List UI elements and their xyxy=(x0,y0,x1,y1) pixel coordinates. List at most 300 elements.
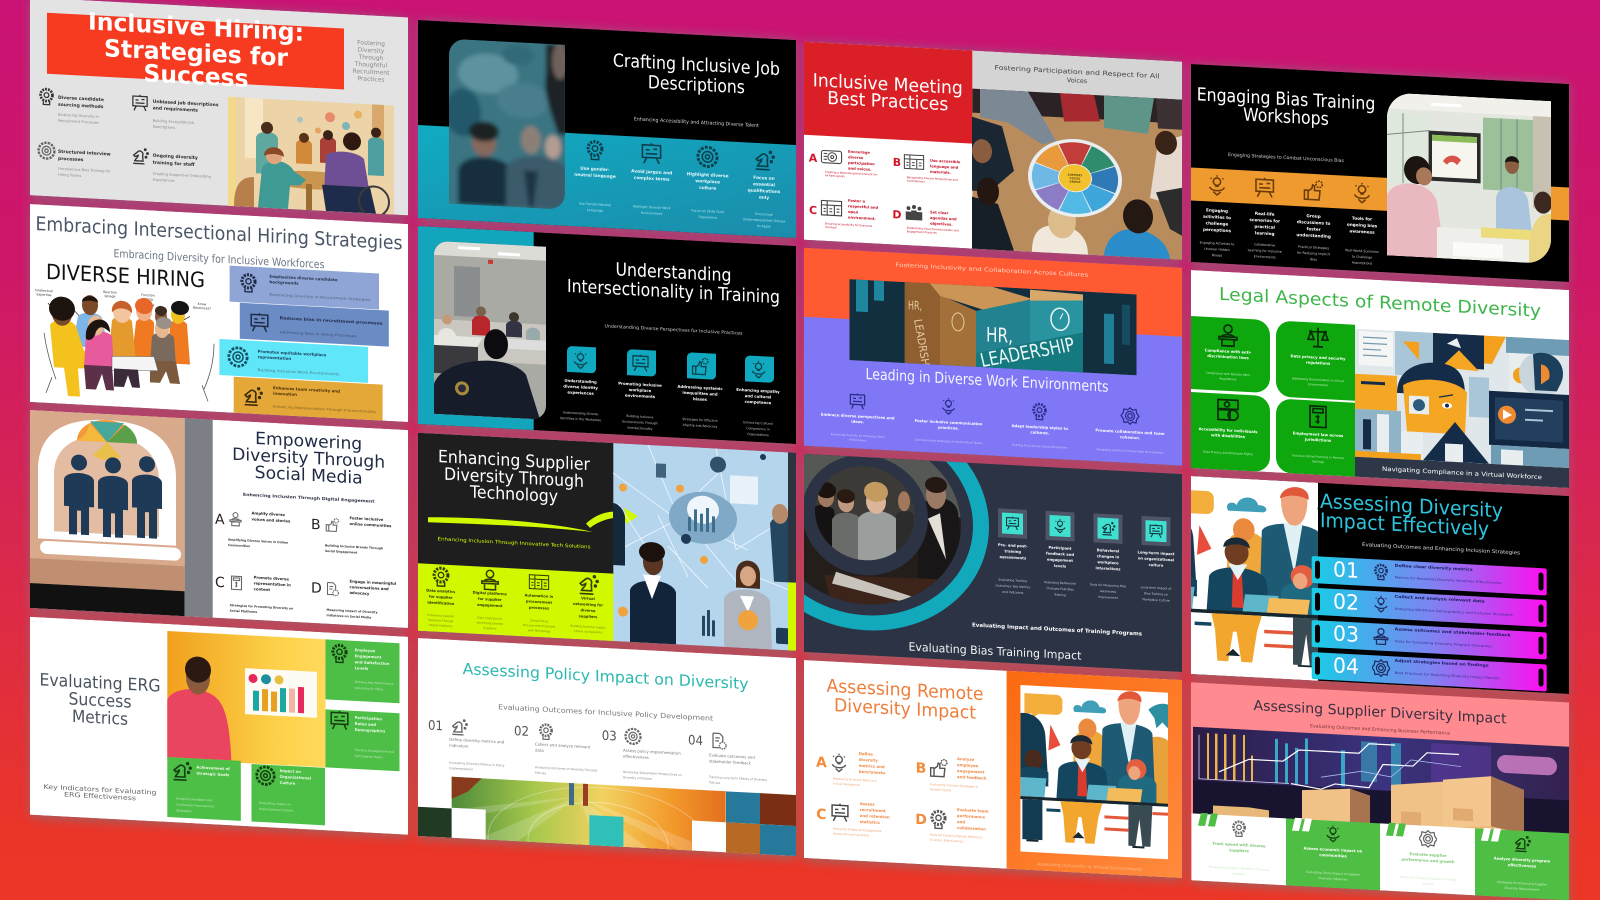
item: training xyxy=(133,148,211,185)
step: representation: Building Inclusive Work Environments xyxy=(258,368,340,376)
card: supplier performance: Success xyxy=(1422,882,1434,886)
photo: circle of people around wheel: SUPPORT xyxy=(1068,173,1082,177)
item D: and xyxy=(957,819,965,824)
item: behavior: Tools for Measuring Bias xyxy=(1089,582,1127,588)
item: empathy: Competence in xyxy=(746,426,770,431)
slide: Legal Aspects of Remote Diversity xyxy=(1191,270,1569,488)
step 01: Implementation xyxy=(449,766,473,771)
item: assessments: Evaluating Training xyxy=(998,578,1027,583)
card: anti-discrimination: Compliance with Remote Work xyxy=(1206,371,1250,377)
item C: statistics xyxy=(860,819,880,825)
item C: Strategies for Promoting Diversity on xyxy=(230,603,293,611)
item: perspectives: ideas. xyxy=(851,419,865,424)
item A: metrics and xyxy=(859,763,885,769)
item: long-term: Long-term Impact of xyxy=(1141,585,1172,591)
item: discussions: discussions to xyxy=(1297,219,1330,226)
bar 04: 04 xyxy=(1333,653,1359,679)
item: collaboration: Navigating Conflict in Diverse Work Environments xyxy=(1096,447,1164,455)
item B: Analyze xyxy=(957,756,975,762)
step 03: Reviewing Stakeholder Perspectives on xyxy=(623,770,682,777)
item D: D xyxy=(915,812,927,828)
item: platforms: Digital platforms xyxy=(473,591,507,596)
item D: Tools for Tracking Remote Workforce xyxy=(929,833,983,839)
step: candidate backgrounds xyxy=(230,266,379,309)
item: training: Creating Supportive Onboarding xyxy=(153,172,211,179)
illustration: diverse hiring sketch: Intellectual xyxy=(35,288,53,293)
subtitle: Evaluating Impact and Outcomes of Training Programs xyxy=(972,623,1142,638)
item B: Building Inclusive Brands Through xyxy=(325,543,383,550)
card: economic impact: Assess economic impact on xyxy=(1304,845,1363,854)
item: networking: Virtual xyxy=(581,596,595,601)
photo: HR leadership cubes: LEADERSHIP xyxy=(978,334,1077,372)
item: behavior xyxy=(1089,513,1127,600)
slide: Engaging Bias Training Workshops xyxy=(1191,64,1569,282)
photo: circle of people around wheel xyxy=(972,89,1182,260)
side subtitle: Through xyxy=(358,54,384,62)
illustration: compliance collage xyxy=(1355,329,1569,468)
step 02: Policies xyxy=(535,771,547,775)
item: culture: culture xyxy=(699,185,716,192)
bar 03: Tools for Evaluating Diversity Program Outcomes xyxy=(1393,639,1492,648)
item: activities xyxy=(1200,174,1234,258)
item C: and retention xyxy=(860,813,890,820)
item C: Assess xyxy=(860,801,875,807)
item: environments: environments xyxy=(625,393,656,399)
item D: Measuring Impact of Diversity xyxy=(326,608,378,614)
orange band xyxy=(1191,168,1569,221)
photo: training room xyxy=(433,239,547,421)
item: behavior: changes in xyxy=(1097,554,1120,559)
item: identity: Identities in the Workplace xyxy=(560,416,601,422)
card: accessibility: Data Privacy and Employee Rights xyxy=(1203,450,1253,456)
item: networking: Chains via Networks xyxy=(574,629,603,634)
illustration: diverse hiring sketch: Reaction xyxy=(103,290,117,295)
item: long-term: Workplace Culture xyxy=(1142,597,1170,603)
item: gender-neutral xyxy=(574,141,616,213)
card: strategic goals: Strategic Goals xyxy=(196,771,230,777)
step: representation: representation xyxy=(258,354,291,361)
title: Success xyxy=(144,59,248,93)
item: engagement: engagement xyxy=(1047,558,1073,563)
step: candidate backgrounds: Emphasizes diverse candidate xyxy=(269,274,338,282)
item B xyxy=(916,754,987,794)
item: discussions: Practical Strategies xyxy=(1298,245,1329,250)
item B: employee xyxy=(957,762,979,768)
card: strategic goals: Strategies xyxy=(176,808,192,813)
step: reduces bias: Addressing Bias in Hiring Processes xyxy=(280,330,357,338)
item C xyxy=(215,573,293,616)
card: participation xyxy=(326,709,400,771)
card: anti-discrimination: discrimination laws xyxy=(1207,353,1250,360)
item: activities: Uncover Hidden xyxy=(1204,247,1230,252)
item: qualifications: to Apply xyxy=(757,224,771,229)
card: program effectiveness: Strategies for Enhancing Supplier xyxy=(1497,880,1548,887)
photo: HR leadership cubes xyxy=(850,279,1136,387)
item: job descriptions: Unbiased job descriptions xyxy=(153,99,219,108)
card: accessibility: with disabilities xyxy=(1211,432,1246,439)
item A xyxy=(215,508,291,550)
step 03: effectiveness xyxy=(623,754,649,760)
card: employment law: jurisdictions xyxy=(1304,436,1332,443)
item C: Ensuring Accessibility for Everyone xyxy=(825,221,873,228)
item: inequalities: biases xyxy=(693,396,708,402)
card: strategic goals: Achievement of xyxy=(196,765,230,771)
card: anti-discrimination: Regulations xyxy=(1220,377,1237,381)
item: qualifications: Underrepresented Groups xyxy=(743,217,786,223)
item: networking: suppliers xyxy=(579,614,597,619)
item C: recruitment xyxy=(860,807,886,813)
item: culture xyxy=(687,146,729,220)
title: Strategies for xyxy=(104,34,288,72)
step: creativity xyxy=(234,377,383,421)
bar 03: Assess outcomes and stakeholder feedback xyxy=(1395,626,1511,637)
step: reduces bias xyxy=(240,303,389,347)
card: engagement: Levels xyxy=(355,665,369,671)
item A: Define xyxy=(859,751,873,757)
item: training: Experiences xyxy=(153,178,175,183)
item B: B xyxy=(893,156,901,169)
item: inequalities: inequalities and xyxy=(682,390,718,397)
item C: Social Platforms xyxy=(230,609,257,614)
item: engagement: feedback and xyxy=(1046,552,1074,557)
item: inequalities: Strategies for Effective xyxy=(682,417,718,423)
item: discussions: for Reducing Implicit xyxy=(1297,251,1331,256)
card: engagement: Defining Key Performance xyxy=(355,680,394,686)
item: inequalities: Allyship and Advocacy xyxy=(683,423,718,429)
lime swoosh and arrow xyxy=(428,497,638,534)
item D: Diversity Effectiveness xyxy=(930,838,963,843)
item: scenarios: practical xyxy=(1254,224,1276,230)
card: supplier performance xyxy=(1380,822,1475,895)
item: empathy: Enhancing Cultural xyxy=(743,420,773,426)
photo: HR leadership cubes: HR, xyxy=(908,298,922,313)
item D: advocacy xyxy=(350,590,370,596)
item: collaboration: Promote collaboration and team xyxy=(1095,427,1165,436)
item: training: Ongoing diversity xyxy=(153,153,198,161)
slide: Assessing Policy Impact on Diversity xyxy=(418,638,796,900)
item: sourcing: Diverse candidate xyxy=(58,95,104,103)
step 02: 02 xyxy=(514,724,529,740)
title xyxy=(1320,489,1503,542)
item A xyxy=(808,150,878,178)
item: tools: to Challenge xyxy=(1352,255,1372,260)
card: economic impact: communities xyxy=(1319,852,1347,859)
item B: B xyxy=(916,760,926,777)
card: participation: Tracking Engagement and xyxy=(354,748,394,754)
item: empathy: Organizations xyxy=(747,432,769,437)
card: engagement xyxy=(326,639,400,703)
card: engagement: and Satisfaction xyxy=(355,659,390,666)
step 01: 01 xyxy=(428,719,443,734)
item: tools: ongoing bias xyxy=(1347,222,1378,228)
illustration: diverse hiring sketch: Hiring xyxy=(143,297,153,302)
item D: Initiatives on Social Media xyxy=(326,613,371,620)
step: representation: Promotes equitable workplace xyxy=(258,349,327,357)
dark left panel xyxy=(418,433,613,574)
card: strategic goals xyxy=(167,757,241,821)
item: assessments: assessments xyxy=(999,555,1027,561)
item A: All Participants xyxy=(825,173,846,178)
title: Diversity Through xyxy=(232,445,385,473)
step: candidate backgrounds: backgrounds xyxy=(269,279,299,286)
slide: Crafting Inclusive Job Descriptions xyxy=(418,20,796,238)
item: environments xyxy=(618,349,662,431)
slide: Assessing Supplier Diversity Impact xyxy=(1191,682,1569,900)
item A: Creating a Welcoming Environment for xyxy=(825,170,878,177)
item: job descriptions: Descriptions xyxy=(153,125,175,130)
card: organizational culture: Culture xyxy=(280,780,296,786)
diagram wheel xyxy=(1028,137,1122,220)
card: engagement: Indicators for ERGs xyxy=(355,686,384,691)
item: assessments: training xyxy=(1005,549,1021,554)
step 01: Evaluating Diversity Metrics in Policy xyxy=(449,761,505,768)
title: Technology xyxy=(469,482,558,507)
item: communication: Foster inclusive communication xyxy=(915,418,983,426)
item: assessments: Pre- and post- xyxy=(998,543,1028,549)
step: creativity: Enhancing Representation Through Intersectionality xyxy=(273,405,376,414)
item C xyxy=(816,799,890,839)
item A: Amplifying Diverse Voices in Online xyxy=(228,537,288,545)
footer caption: Navigating Compliance in a Virtual Workforce xyxy=(1382,466,1542,481)
orange top band xyxy=(804,248,1182,337)
item: gender-neutral: Use gender- xyxy=(580,166,610,173)
item: tools xyxy=(1345,182,1379,266)
item D: D xyxy=(311,580,322,597)
step 02: Analyzing Outcomes of Diversity-Focused xyxy=(535,765,597,773)
item D: Engagement Practices xyxy=(907,229,937,235)
card: supplier performance: Metrics for Tracking Supplier Diversity xyxy=(1400,875,1457,882)
step 03: Assess policy implementation xyxy=(623,748,681,756)
item: qualifications: Encourage xyxy=(755,212,773,217)
item: scenarios: Learning for Inclusive xyxy=(1248,248,1282,254)
step 01: Define diversity metrics and xyxy=(449,737,505,745)
bar 03 xyxy=(1312,619,1547,659)
item C: Involved xyxy=(825,225,837,230)
title: Descriptions xyxy=(648,72,745,98)
item A: Communities xyxy=(228,543,250,548)
title: Workshops xyxy=(1243,104,1329,130)
item: culture: Focus on Skills Over xyxy=(691,208,725,214)
title: Inclusive Meeting xyxy=(813,70,963,99)
side subtitle: Practices xyxy=(357,75,385,84)
item: qualifications: only xyxy=(759,195,769,201)
step 02: data xyxy=(535,748,544,753)
item: gender-neutral: Language xyxy=(587,208,603,213)
photo: blurred people xyxy=(449,40,565,209)
title xyxy=(814,73,962,110)
item A xyxy=(816,749,886,788)
title xyxy=(232,428,385,490)
bar 02: Analyzing Workforce Demographics and Inclusion Strategies xyxy=(1395,607,1513,617)
item: platforms: engagement xyxy=(477,603,503,608)
item D: objectives. xyxy=(930,222,953,227)
card: participation: Demographics xyxy=(355,727,386,734)
item B: engagement xyxy=(957,768,985,775)
item D: Evaluate team xyxy=(957,807,989,814)
card: program effectiveness: Analyze diversity program xyxy=(1494,856,1550,864)
card: data privacy xyxy=(1276,321,1355,401)
item B xyxy=(893,154,961,186)
photo: presenter in meeting room xyxy=(1386,92,1555,267)
item: automation xyxy=(523,574,556,634)
item: analytics: Relations Through xyxy=(428,618,454,623)
item A: benchmarks xyxy=(859,769,886,775)
item: activities: activities to xyxy=(1203,214,1231,220)
side subtitle: Diversity xyxy=(358,47,385,55)
item: culture: workplace xyxy=(695,178,720,186)
title xyxy=(826,676,984,724)
illustration: diverse hiring sketch: Function xyxy=(141,293,155,298)
slide: Inclusive Hiring xyxy=(30,0,408,218)
item: job descriptions: and requirements xyxy=(153,105,198,114)
item B: B xyxy=(311,517,321,533)
item: identity: Understanding xyxy=(564,378,597,384)
item A: voices and stories xyxy=(252,516,291,524)
subtitle: Understanding Diverse Perspectives for Inclusive Practices xyxy=(604,323,743,337)
step 04: Tracking Long-term Effects of Diversity xyxy=(708,775,767,782)
item: networking: diverse xyxy=(581,608,596,613)
card: program effectiveness: effectiveness xyxy=(1508,862,1537,869)
card: anti-discrimination xyxy=(1191,316,1270,393)
item A: participation xyxy=(848,161,875,166)
card: strategic goals: Continuous Improvement xyxy=(176,802,215,808)
illustration: diverse hiring sketch: DIVERSE HIRING xyxy=(46,259,205,292)
subtitle: Engaging Strategies to Combat Unconscious Bias xyxy=(1228,152,1345,164)
item D: D xyxy=(892,208,902,222)
item: tools: Assumptions xyxy=(1352,261,1373,266)
card: organizational culture: Organizational xyxy=(280,774,311,781)
subtitle: Enhancing Inclusion Through Digital Engagement xyxy=(243,492,374,504)
card: data privacy: Environments xyxy=(1308,382,1328,387)
subtitle: Fostering Inclusivity and Collaboration Across Cultures xyxy=(895,263,1088,279)
item: networking: Building Inclusive Supply xyxy=(571,624,606,630)
item B: Remote Teams xyxy=(930,787,952,792)
photo: circle of people around wheel: FOCUS xyxy=(1070,176,1080,181)
card: accessibility xyxy=(1191,392,1270,472)
card: supplier performance: Evaluate supplier xyxy=(1409,851,1447,858)
bar 02: 02 xyxy=(1333,589,1359,615)
item: platforms: Data Analytics for xyxy=(477,616,503,621)
item: behavior: interactions xyxy=(1095,566,1121,572)
item: jargon: Environment xyxy=(641,211,663,216)
subtitle: Enhancing Inclusion Through Innovative Tech Solutions xyxy=(438,536,591,550)
step: reduces bias: Reduces bias in recruitment processes xyxy=(280,315,383,326)
step 02 xyxy=(514,723,597,778)
illustration: diverse hiring sketch: Resources? xyxy=(193,306,211,311)
slide: Understanding Intersectionality in Training xyxy=(418,226,796,444)
item: platforms: Identifying Diverse xyxy=(477,621,503,626)
item: analytics: identification xyxy=(427,601,455,606)
item: perspectives: Embrace diverse perspectives and xyxy=(821,412,895,421)
illustration: team at laptops xyxy=(1015,675,1185,874)
item: tools: Tools for xyxy=(1352,216,1373,222)
item D: Establishing Clear Communication and xyxy=(907,226,959,233)
item C: Analyzing Employee Engagement xyxy=(833,827,883,833)
item: environments: Promoting inclusive xyxy=(618,381,662,388)
teal side band xyxy=(418,226,534,430)
item: engagement: Training xyxy=(1053,593,1066,597)
item: scenarios: scenarios for xyxy=(1249,217,1281,224)
title: Evaluating Bias Training Impact xyxy=(908,640,1082,663)
item B: Recognizing Diverse Perspectives and xyxy=(907,175,958,182)
title: Social Media xyxy=(255,463,363,489)
card: organizational culture xyxy=(252,764,325,825)
card: participation: Participation Rates xyxy=(355,754,383,759)
illustration: mosaic path footer xyxy=(418,775,796,900)
step 01: indicators xyxy=(449,743,468,749)
photo: HR leadership cubes: LEADRSHIP xyxy=(911,318,934,376)
side subtitle: Thoughtful xyxy=(354,61,388,70)
item: automation: Automation in xyxy=(525,593,554,599)
item: perspectives: Embracing Diversity for Enhanced Team xyxy=(831,432,885,439)
item: qualifications: essential xyxy=(753,181,775,188)
subtitle: Evaluating Outcomes for Inclusive Policy Development xyxy=(498,703,713,723)
item: environments: Building Inclusive xyxy=(626,414,654,419)
item: leadership: Adapt leadership styles to xyxy=(1012,423,1068,431)
item C: content xyxy=(254,586,270,592)
item: sourcing: Recruitment Processes xyxy=(58,119,99,125)
item B: Foster inclusive xyxy=(350,515,384,522)
item C: C xyxy=(215,575,225,591)
grey divider strip xyxy=(185,418,213,618)
item: empathy: and cultural xyxy=(745,393,771,400)
grey subtitle bar xyxy=(972,51,1182,100)
item: culture: Experience xyxy=(699,215,717,220)
item: interview xyxy=(39,142,111,180)
title xyxy=(90,12,302,87)
item: communication xyxy=(915,396,983,445)
step 03: Diversity Initiatives xyxy=(623,775,652,781)
title: Metrics xyxy=(72,707,128,730)
step 04: stakeholder feedback xyxy=(709,758,752,766)
item: analytics: for supplier xyxy=(429,595,453,600)
item: behavior: Awareness xyxy=(1100,589,1116,594)
item: assessments: and Indicators xyxy=(1002,590,1024,595)
item: collaboration: cohesion. xyxy=(1120,434,1141,440)
subtitle: Voices xyxy=(1067,76,1088,85)
item: communication: Communication Strategies for Multicultural Teams xyxy=(915,438,983,445)
item A: Amplify diverse xyxy=(252,510,285,517)
subtitle: Key Indicators for Evaluating xyxy=(43,783,156,797)
item B: Evaluating Inclusion Strategies in xyxy=(930,782,978,789)
item A: Measuring Diversity Metrics in xyxy=(833,777,877,783)
item: activities: challenge xyxy=(1206,220,1229,227)
step: candidate backgrounds: Embracing Diversity in Recruitment Strategies xyxy=(269,293,371,302)
item: identity: experiences xyxy=(567,390,595,396)
item: empathy: Enhancing empathy xyxy=(736,387,780,394)
title xyxy=(567,257,780,308)
item B: Social Engagement xyxy=(325,549,358,555)
card: engagement: Employee xyxy=(355,647,376,653)
item A: A xyxy=(809,151,818,165)
title: Inclusive Hiring: xyxy=(88,7,304,47)
item B: Use accessible xyxy=(930,159,961,164)
item C: respectful and xyxy=(848,204,878,210)
item C: Across Diverse Locations xyxy=(833,832,869,837)
card: accessibility: Accessibility for individuals xyxy=(1199,426,1258,434)
title: Embracing Intersectional Hiring Strategies xyxy=(35,213,402,254)
lime band xyxy=(418,563,613,641)
item: behavior: Improvement xyxy=(1098,595,1119,600)
title xyxy=(614,53,780,95)
item D xyxy=(311,576,396,621)
item: job descriptions: Building Accessible Job xyxy=(153,119,195,125)
item: analytics: Enhancing Supplier xyxy=(427,613,455,618)
item D: collaboration xyxy=(957,825,986,832)
step: creativity: Enhances team creativity and xyxy=(273,385,340,394)
item: identity xyxy=(560,346,601,422)
item: discussions: Group xyxy=(1306,213,1321,219)
